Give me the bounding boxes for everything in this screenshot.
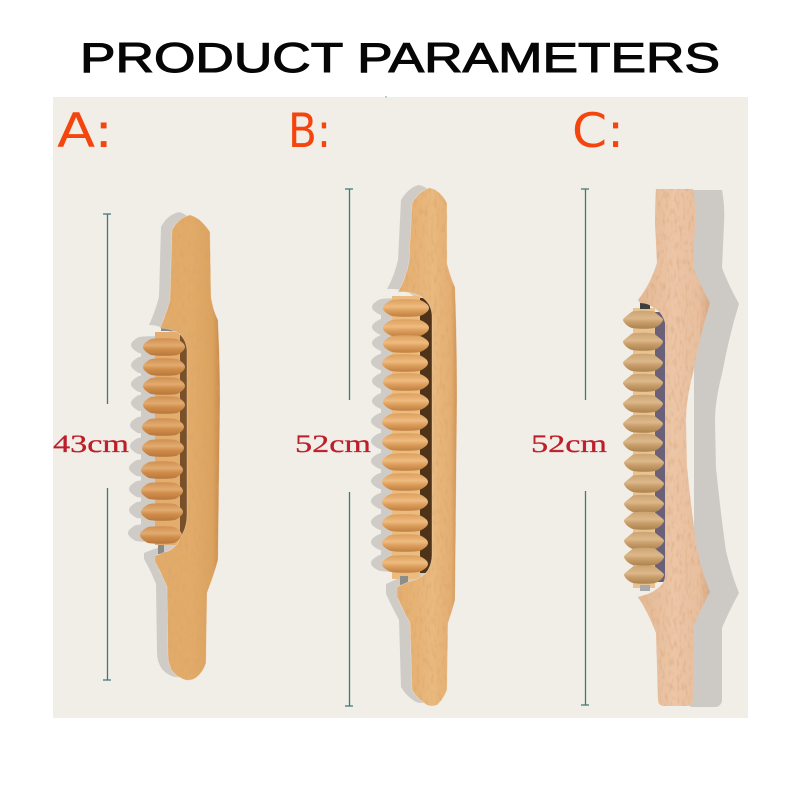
dimension line: A bbox=[103, 214, 111, 680]
title: PRODUCT PARAMETERS bbox=[80, 34, 720, 81]
dimension text: C 52cm: 52cm bbox=[531, 431, 608, 458]
product A: roller massager bbox=[128, 212, 220, 680]
dimension text: B 52cm: 52cm bbox=[295, 431, 372, 458]
product C: roller massager bbox=[623, 189, 739, 707]
label: C: C: bbox=[572, 104, 624, 159]
product B: roller massager bbox=[371, 185, 457, 706]
label: B: B: bbox=[288, 104, 331, 159]
panel: beige background bbox=[53, 97, 748, 718]
dimension line: C bbox=[581, 189, 589, 705]
dimension line: B bbox=[345, 189, 353, 706]
label: A: A: bbox=[57, 104, 113, 159]
dimension text: A 43cm: 43cm bbox=[53, 431, 130, 458]
